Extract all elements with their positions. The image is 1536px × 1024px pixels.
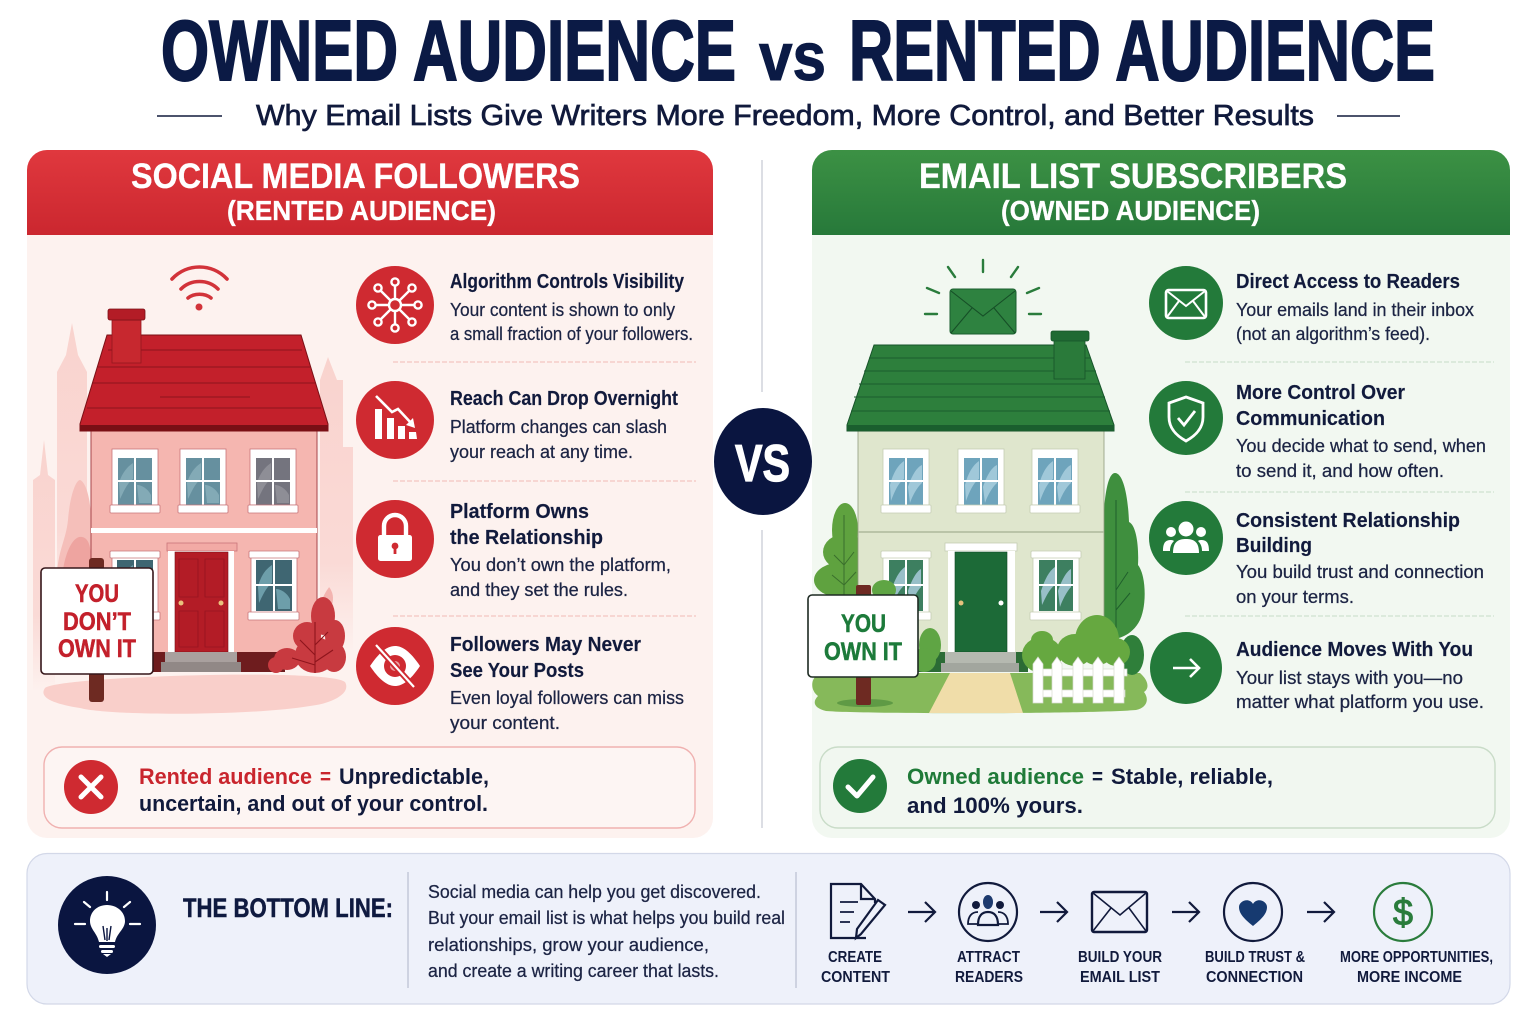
step: more opportunities, more income bbox=[1340, 883, 1493, 986]
callout: rented audience: Rented audience bbox=[139, 764, 312, 789]
bottom line text: But your email list is what helps you build real bbox=[428, 908, 785, 928]
icon: wifi bbox=[172, 267, 227, 310]
step: attract readers: READERS bbox=[955, 969, 1023, 986]
illustration: rented house bbox=[33, 267, 353, 714]
item: consistent relationship building: Building bbox=[1236, 535, 1312, 557]
item: direct access to readers: Your emails land in their inbox bbox=[1236, 300, 1474, 320]
panel: the bottom line: THE BOTTOM LINE: bbox=[183, 893, 393, 923]
tall tree bbox=[1103, 473, 1145, 640]
arrow bbox=[908, 902, 935, 922]
item: direct access to readers: Direct Access to Readers bbox=[1236, 271, 1460, 293]
item: platform owns the relationship: You don’t own the platform, bbox=[450, 555, 671, 575]
panel: email list subscribers bbox=[808, 150, 1510, 838]
step: build trust and connection: BUILD TRUST & bbox=[1205, 949, 1305, 966]
icon: people bbox=[1149, 501, 1223, 575]
item: algorithm controls visibility: Your content is shown to only bbox=[450, 300, 675, 320]
callout: owned audience bbox=[820, 747, 1495, 828]
arrow bbox=[1307, 902, 1334, 922]
item: platform owns the relationship bbox=[356, 500, 671, 600]
icon: arrow bbox=[1150, 632, 1222, 704]
bottom line text: Social media can help you get discovered. bbox=[428, 882, 761, 902]
item: more control over communication: to send it, and how often. bbox=[1236, 461, 1444, 481]
icon: heart bbox=[1224, 883, 1282, 941]
callout: owned audience: and 100% yours. bbox=[907, 793, 1083, 818]
item: reach can drop overnight bbox=[356, 381, 678, 462]
icon: glowing envelope bbox=[925, 260, 1041, 334]
illustration: owned house bbox=[808, 260, 1147, 713]
title: OWNED AUDIENCE bbox=[161, 4, 736, 99]
panel: social media followers bbox=[27, 150, 713, 838]
item: reach can drop overnight: Reach Can Drop Overnight bbox=[450, 388, 678, 410]
panel header: rented audience: SOCIAL MEDIA FOLLOWERS bbox=[131, 157, 580, 196]
step: attract readers bbox=[955, 883, 1023, 986]
icon: check mark bbox=[833, 759, 887, 813]
item: followers may never see your posts: Even loyal followers can miss bbox=[450, 688, 684, 708]
icon: falling chart bbox=[356, 381, 434, 459]
callout: rented audience: = bbox=[320, 764, 331, 789]
item: platform owns the relationship: the Relationship bbox=[450, 527, 603, 549]
divider and vs badge: VS bbox=[735, 435, 790, 493]
panel header: rented audience: (RENTED AUDIENCE) bbox=[227, 195, 496, 226]
item: more control over communication bbox=[1149, 381, 1486, 481]
item: consistent relationship building: on your terms. bbox=[1236, 587, 1354, 607]
lawn bbox=[812, 673, 1147, 713]
item: direct access to readers bbox=[1149, 266, 1474, 344]
item: direct access to readers: (not an algorithm’s feed). bbox=[1236, 324, 1430, 344]
step: create content: CREATE bbox=[828, 949, 882, 966]
item: audience moves with you: matter what platform you use. bbox=[1236, 692, 1484, 712]
sign: you own it: OWN IT bbox=[824, 638, 902, 666]
callout: rented audience: uncertain, and out of your control. bbox=[139, 791, 488, 816]
icon: envelope outline bbox=[1092, 892, 1147, 932]
icon: dollar coin: $ bbox=[1393, 892, 1413, 933]
item: algorithm controls visibility bbox=[356, 266, 693, 344]
icon: dollar coin bbox=[1374, 883, 1432, 941]
item: platform owns the relationship: and they set the rules. bbox=[450, 580, 628, 600]
item: platform owns the relationship: Platform Owns bbox=[450, 501, 589, 523]
step: more opportunities, more income: MORE INCOME bbox=[1357, 969, 1462, 986]
item: more control over communication: More Control Over bbox=[1236, 382, 1405, 404]
sign: you own it: YOU bbox=[841, 610, 886, 638]
panel header: owned audience: (OWNED AUDIENCE) bbox=[1001, 195, 1260, 226]
callout: rented audience bbox=[44, 747, 695, 828]
icon: padlock bbox=[356, 500, 434, 578]
callout: owned audience: = bbox=[1092, 764, 1103, 789]
callout: owned audience: Owned audience bbox=[907, 764, 1084, 789]
item: followers may never see your posts: Followers May Never bbox=[450, 634, 641, 656]
callout: rented audience: Unpredictable, bbox=[339, 764, 489, 789]
bush bbox=[268, 587, 346, 673]
panel header: owned audience bbox=[812, 150, 1510, 235]
icon: document and pencil bbox=[831, 884, 885, 938]
icon: light bulb bbox=[58, 876, 156, 974]
title bbox=[161, 4, 1435, 99]
bottom line text: relationships, grow your audience, bbox=[428, 935, 709, 955]
icon: readers group bbox=[959, 883, 1017, 941]
item: followers may never see your posts bbox=[356, 627, 684, 733]
step: attract readers: ATTRACT bbox=[957, 949, 1020, 966]
sign: you own it bbox=[808, 585, 918, 707]
callout: owned audience: Stable, reliable, bbox=[1111, 764, 1273, 789]
panel header: owned audience: EMAIL LIST SUBSCRIBERS bbox=[919, 157, 1347, 196]
bottom line text bbox=[428, 882, 785, 981]
bottom line text: and create a writing career that lasts. bbox=[428, 961, 719, 981]
item: more control over communication: Communication bbox=[1236, 408, 1385, 430]
item: reach can drop overnight: your reach at any time. bbox=[450, 442, 633, 462]
item: reach can drop overnight: Platform changes can slash bbox=[450, 417, 667, 437]
left tree bbox=[814, 503, 872, 598]
title: vs bbox=[759, 19, 826, 95]
item: followers may never see your posts: your content. bbox=[450, 713, 560, 733]
panel: the bottom line bbox=[27, 854, 1510, 1004]
divider and vs badge bbox=[714, 160, 812, 828]
sign: you don't own it: DON’T bbox=[63, 608, 131, 636]
icon: shield check bbox=[1149, 381, 1223, 455]
icon: x mark bbox=[64, 760, 118, 814]
step: build trust and connection bbox=[1205, 883, 1305, 986]
item: followers may never see your posts: See Your Posts bbox=[450, 660, 584, 682]
item: consistent relationship building: You build trust and connection bbox=[1236, 562, 1484, 582]
item: audience moves with you bbox=[1150, 632, 1484, 712]
step: create content: CONTENT bbox=[821, 969, 890, 986]
panel header: rented audience bbox=[27, 150, 713, 235]
icon: algorithm network bbox=[356, 266, 434, 344]
subtitle: Why Email Lists Give Writers More Freedom, More Control, and Better Results bbox=[256, 100, 1314, 132]
item: audience moves with you: Your list stays with you—no bbox=[1236, 668, 1463, 688]
arrow bbox=[1040, 902, 1067, 922]
item: consistent relationship building bbox=[1149, 501, 1484, 607]
arrow bbox=[1172, 902, 1199, 922]
icon: envelope bbox=[1149, 266, 1223, 340]
picket fence bbox=[1033, 657, 1127, 703]
step: build your email list: EMAIL LIST bbox=[1080, 969, 1160, 986]
item: consistent relationship building: Consistent Relationship bbox=[1236, 510, 1460, 532]
sign: you don't own it: OWN IT bbox=[58, 635, 136, 663]
sign: you don't own it: YOU bbox=[75, 580, 119, 608]
item: more control over communication: You decide what to send, when bbox=[1236, 436, 1486, 456]
step: build your email list bbox=[1078, 892, 1162, 986]
item: algorithm controls visibility: a small fraction of your followers. bbox=[450, 324, 693, 344]
step: build trust and connection: CONNECTION bbox=[1206, 969, 1303, 986]
step: more opportunities, more income: MORE OPPORTUNITIES, bbox=[1340, 949, 1493, 966]
small bush behind sign bbox=[872, 580, 896, 600]
item: audience moves with you: Audience Moves With You bbox=[1236, 639, 1473, 661]
step: create content bbox=[821, 884, 890, 986]
icon: crossed-out eye bbox=[356, 627, 434, 705]
step: build your email list: BUILD YOUR bbox=[1078, 949, 1162, 966]
item: algorithm controls visibility: Algorithm Controls Visibility bbox=[450, 271, 685, 293]
shrubs bbox=[912, 615, 1144, 675]
sign: you don't own it bbox=[41, 558, 153, 702]
